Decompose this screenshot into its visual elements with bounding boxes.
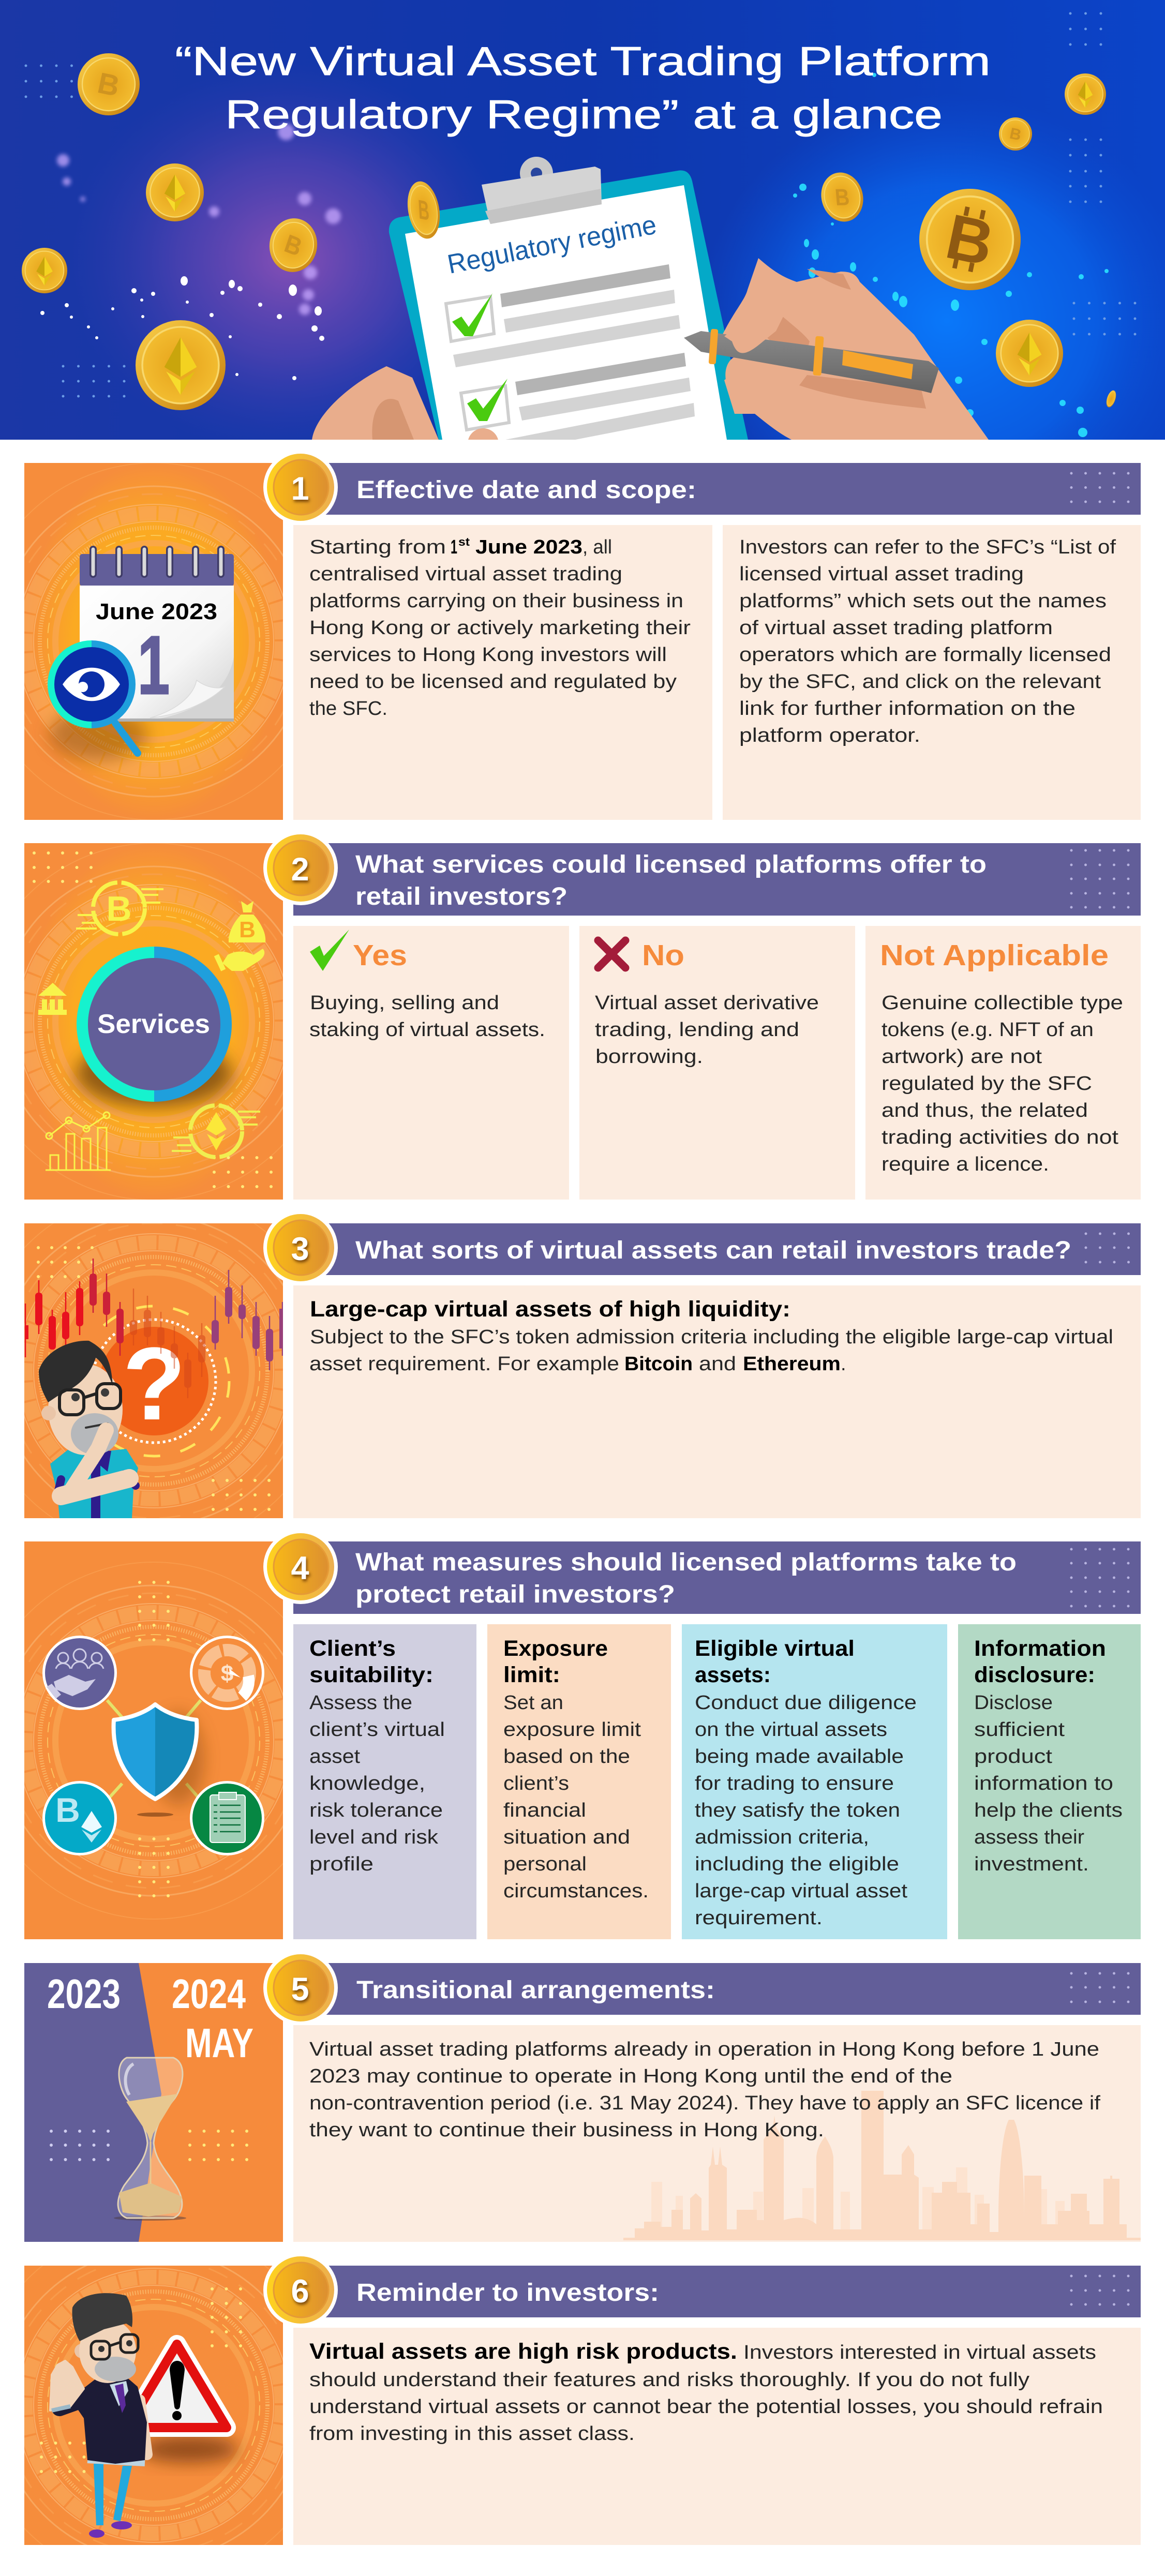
text panel: risk reminder: from investing in this asset class. xyxy=(309,2423,635,2445)
text panel: effective date: 1 xyxy=(451,536,457,558)
text panel: large-cap virtual assets: Bitcoin xyxy=(624,1353,693,1375)
icon: virtual assets xyxy=(42,1781,117,1855)
panel: no: No xyxy=(642,939,684,972)
panel: exposure limit: personal xyxy=(503,1853,587,1875)
icon: bitcoin coin xyxy=(78,53,140,115)
panel: eligible virtual assets: including the eligible xyxy=(695,1853,899,1875)
icon: magnifier with eye xyxy=(48,640,138,753)
panel: information disclosure: help the clients xyxy=(974,1800,1123,1821)
heading: Effective date and scope: xyxy=(356,476,696,504)
panel: not applicable: and thus, the related xyxy=(882,1100,1088,1121)
panel: not applicable: Not Applicable xyxy=(880,939,1109,972)
icon: bitcoin coin right xyxy=(816,168,869,227)
panel: not applicable: trading activities do not xyxy=(882,1127,1119,1148)
header bar xyxy=(293,1963,1141,2015)
text panel: list of licensed platforms: of virtual asset trading platform xyxy=(739,617,1053,639)
number badge 2: 2 xyxy=(291,851,309,888)
text panel: effective date: centralised virtual asset trading xyxy=(309,563,622,585)
number badge 4: 4 xyxy=(291,1550,309,1586)
icon: large bitcoin coin xyxy=(919,189,1021,290)
number badge 5 xyxy=(263,1951,338,2025)
number badge 6: 6 xyxy=(291,2273,309,2310)
panel: eligible virtual assets: they satisfy the token xyxy=(695,1800,900,1821)
panel: eligible virtual assets: for trading to ensure xyxy=(695,1773,894,1794)
icon: coin on clipboard: B xyxy=(417,194,430,227)
header bar xyxy=(293,843,1141,916)
panel: client's suitability: Client’s xyxy=(309,1636,396,1661)
right hand with pen xyxy=(684,258,989,440)
icon: ethereum coin xyxy=(1065,73,1106,115)
year labels: 2023 xyxy=(47,1971,121,2017)
text panel: large-cap virtual assets: Subject to the SFC’s token admission criteria including the eligible large-cap virtual xyxy=(310,1326,1113,1348)
panel: calendar illustration xyxy=(0,463,332,820)
text panel: risk reminder: Virtual assets are high risk products. xyxy=(309,2339,737,2364)
question circle xyxy=(79,1306,229,1456)
panel: eligible virtual assets: admission criteria, xyxy=(695,1826,869,1848)
text panel: effective date: June 2023 xyxy=(475,536,582,558)
panel: client's suitability xyxy=(293,1624,476,1939)
panel: eligible virtual assets: large-cap virtual asset xyxy=(695,1880,907,1902)
text panel: effective date: need to be licensed and regulated by xyxy=(309,671,677,693)
panel: hourglass illustration xyxy=(24,1963,283,2242)
panel: eligible virtual assets xyxy=(682,1624,947,1939)
clipboard heading: Regulatory regime xyxy=(445,210,659,280)
text panel: list of licensed platforms: platforms” which sets out the names xyxy=(739,590,1107,612)
section 4: protection measures xyxy=(0,1530,1141,1939)
panel: exposure limit: situation and xyxy=(503,1826,630,1848)
panel: not applicable: Genuine collectible type xyxy=(882,992,1123,1014)
number badge 3: 3 xyxy=(291,1231,309,1267)
text panel: large-cap virtual assets: and xyxy=(699,1353,736,1375)
number badge 1: 1 xyxy=(291,471,309,507)
panel: yes: staking of virtual assets. xyxy=(309,1019,545,1041)
number badge 6 xyxy=(263,2253,338,2327)
number badge 2 xyxy=(263,831,338,905)
candlestick chart xyxy=(25,1259,283,1398)
panel: client's suitability: suitability: xyxy=(309,1663,434,1687)
panel: eligible virtual assets: assets: xyxy=(695,1663,771,1687)
panel: thinking man illustration xyxy=(0,1192,332,1549)
year labels xyxy=(47,1971,253,2066)
panel: eligible virtual assets: on the virtual assets xyxy=(695,1719,887,1741)
section 5: transitional arrangements xyxy=(24,1951,1141,2242)
text panel: large-cap virtual assets: Large-cap virtual assets of high liquidity: xyxy=(310,1297,790,1322)
icon: calendar xyxy=(80,549,234,722)
icon: client hand and people xyxy=(42,1636,117,1710)
number badge 4 xyxy=(263,1530,338,1604)
panel: client's suitability: risk tolerance xyxy=(309,1800,443,1821)
icon: coin on clipboard xyxy=(404,179,444,241)
text panel: effective date: Starting from xyxy=(309,536,446,558)
text panel: effective date xyxy=(293,525,712,820)
number badge 1 xyxy=(263,450,338,525)
section 1: effective date and scope xyxy=(0,450,1141,820)
icon: tilted bitcoin coin xyxy=(269,218,318,272)
icon: risk gauge xyxy=(190,1636,264,1710)
panel: information disclosure xyxy=(958,1624,1141,1939)
icon: shield xyxy=(114,1704,197,1799)
number badge 3 xyxy=(263,1210,338,1285)
text panel: effective date: , all xyxy=(582,536,612,558)
question circle: ? xyxy=(123,1326,186,1442)
heading: Transitional arrangements: xyxy=(356,1976,715,2004)
panel: eligible virtual assets: requirement. xyxy=(695,1907,823,1929)
icon: bitcoin ring: B xyxy=(106,889,132,928)
text panel: transition period xyxy=(293,2025,1141,2242)
text panel: risk reminder: understand virtual assets or cannot bear the potential losses, you should refrain xyxy=(309,2396,1103,2418)
icon: virtual assets: B xyxy=(55,1791,80,1829)
heading xyxy=(355,851,987,910)
panel: exposure limit: Exposure xyxy=(503,1636,608,1661)
text panel: large-cap virtual assets: Ethereum xyxy=(743,1353,841,1375)
panel: warning illustration xyxy=(0,2227,332,2576)
section 2: services xyxy=(0,831,1141,1200)
panel: client's suitability: level and risk xyxy=(309,1826,439,1848)
title: “New Virtual Asset Trading Platform xyxy=(175,38,991,84)
icon: ethereum coin far left xyxy=(22,248,67,293)
services circle: Services xyxy=(97,1009,210,1039)
panel: not applicable: tokens (e.g. NFT of an xyxy=(882,1019,1094,1041)
calendar month: June 2023 xyxy=(96,599,217,624)
panel: exposure limit: exposure limit xyxy=(503,1719,641,1741)
title xyxy=(175,38,991,137)
header bar xyxy=(293,1541,1141,1614)
icon: ethereum coin right xyxy=(996,320,1063,387)
section 3: tradable virtual assets xyxy=(0,1192,1141,1549)
heading: What measures should licensed platforms take to xyxy=(355,1549,1017,1576)
icon: small bitcoin coin: B xyxy=(1008,125,1023,144)
panel: no: trading, lending and xyxy=(595,1019,799,1041)
year labels: MAY xyxy=(185,2020,253,2066)
panel: yes xyxy=(293,926,569,1200)
panel: shield illustration xyxy=(0,1541,332,1939)
panel: no: borrowing. xyxy=(595,1046,703,1068)
text panel: list of licensed platforms: operators which are formally licensed xyxy=(739,644,1111,666)
panel: services illustration xyxy=(0,843,332,1200)
panel: exposure limit: financial xyxy=(503,1800,586,1821)
icon: tilted bitcoin coin: B xyxy=(281,229,305,262)
icon: bitcoin coin: B xyxy=(95,66,123,103)
panel: client's suitability: Assess the xyxy=(309,1692,412,1714)
panel: no xyxy=(579,926,855,1200)
header bar xyxy=(293,1223,1141,1275)
text panel: large-cap virtual assets xyxy=(293,1285,1141,1518)
text panel: large-cap virtual assets: asset requirement. For example xyxy=(309,1353,619,1375)
icon: red cross xyxy=(598,940,625,968)
text panel: large-cap virtual assets: . xyxy=(841,1353,846,1375)
panel: exposure limit: circumstances. xyxy=(503,1880,649,1902)
panel: exposure limit: Set an xyxy=(503,1692,563,1714)
title: Regulatory Regime” at a glance xyxy=(225,92,943,137)
left hand xyxy=(312,366,439,440)
panel: eligible virtual assets: Conduct due diligence xyxy=(695,1692,917,1714)
text panel: effective date: platforms carrying on their business in xyxy=(309,590,683,612)
icon: tiny coin xyxy=(1104,389,1118,409)
icon: ethereum ring xyxy=(172,1105,260,1157)
icon: money bag and hand: B xyxy=(239,917,256,942)
section 6: reminder to investors xyxy=(0,2227,1141,2576)
icon: hourglass xyxy=(114,2058,186,2221)
text panel: effective date: the SFC. xyxy=(309,698,387,720)
panel: no: Virtual asset derivative xyxy=(595,992,819,1014)
panel: information disclosure: Information xyxy=(974,1636,1106,1661)
text panel: list of licensed platforms: link for further information on the xyxy=(739,698,1076,720)
icon: bank xyxy=(38,983,67,1015)
heading xyxy=(355,1549,1017,1608)
year labels: 2024 xyxy=(172,1971,246,2017)
panel: information disclosure: product xyxy=(974,1746,1053,1768)
icon: large bitcoin coin: B xyxy=(940,200,999,279)
text panel: effective date: st xyxy=(458,535,470,548)
services circle xyxy=(77,947,232,1102)
icon: ethereum coin left xyxy=(146,163,204,221)
text panel: transition period: they want to continue their business in Hong Kong. xyxy=(309,2119,824,2141)
icon: small bitcoin coin xyxy=(999,117,1032,151)
heading: protect retail investors? xyxy=(355,1581,675,1608)
panel: client's suitability: client’s virtual xyxy=(309,1719,445,1741)
icon: large ethereum coin xyxy=(136,320,226,410)
clipboard xyxy=(389,157,748,440)
text panel: transition period: non-contravention period (i.e. 31 May 2024). They have to apply an SFC licence if xyxy=(309,2092,1100,2114)
panel: exposure limit: limit: xyxy=(503,1663,560,1687)
panel: not applicable: regulated by the SFC xyxy=(882,1073,1092,1095)
icon: warning triangle xyxy=(127,2344,227,2428)
panel: client's suitability: asset xyxy=(309,1746,360,1768)
panel: client's suitability: profile xyxy=(309,1853,374,1875)
text panel: effective date: Hong Kong or actively marketing their xyxy=(309,617,691,639)
header bar xyxy=(293,463,1141,515)
icon: growth chart xyxy=(46,1112,111,1170)
hero banner xyxy=(0,0,1165,440)
man raising hand xyxy=(50,2293,147,2538)
text panel: risk reminder: Investors interested in virtual assets xyxy=(743,2342,1096,2363)
text panel: list of licensed platforms: Investors can refer to the SFC’s “List of xyxy=(739,536,1116,558)
panel: not applicable: artwork) are not xyxy=(882,1046,1042,1068)
panel: exposure limit: client’s xyxy=(503,1773,569,1794)
panel: yes: Yes xyxy=(353,939,407,972)
text panel: list of licensed platforms: licensed virtual asset trading xyxy=(739,563,1024,585)
text panel: transition period: 2023 may continue to operate in Hong Kong until the end of the xyxy=(309,2065,952,2087)
heading: retail investors? xyxy=(355,883,567,910)
panel: exposure limit: based on the xyxy=(503,1746,630,1768)
text panel: transition period: Virtual asset trading platforms already in operation in Hong Kong before 1 June xyxy=(309,2039,1099,2060)
panel: eligible virtual assets: being made available xyxy=(695,1746,904,1768)
icon: bitcoin ring xyxy=(76,882,163,934)
text panel: list of licensed platforms: platform operator. xyxy=(739,725,920,746)
panel: eligible virtual assets: Eligible virtual xyxy=(695,1636,855,1661)
text panel: effective date: services to Hong Kong investors will xyxy=(309,644,667,666)
heading: What sorts of virtual assets can retail investors trade? xyxy=(355,1237,1071,1264)
text panel: list of licensed platforms xyxy=(723,525,1141,820)
panel: information disclosure: sufficient xyxy=(974,1719,1065,1741)
text panel: risk reminder xyxy=(293,2328,1141,2545)
panel: information disclosure: disclosure: xyxy=(974,1663,1095,1687)
panel: exposure limit xyxy=(487,1624,671,1939)
skyline xyxy=(623,2091,1141,2240)
panel: not applicable: require a licence. xyxy=(882,1154,1049,1175)
icon: bitcoin coin right: B xyxy=(834,184,850,211)
header bar xyxy=(293,2266,1141,2317)
icon: money bag and hand xyxy=(214,901,265,971)
icon: green check xyxy=(310,930,349,971)
panel: information disclosure: Disclose xyxy=(974,1692,1053,1714)
panel: information disclosure: assess their xyxy=(974,1826,1084,1848)
thumb on clipboard xyxy=(468,428,499,459)
number badge 5: 5 xyxy=(291,1971,309,2008)
panel: yes: Buying, selling and xyxy=(310,992,499,1014)
text panel: risk reminder: should understand their features and risks thoroughly. If you do not fully xyxy=(309,2369,1029,2391)
panel: not applicable xyxy=(865,926,1141,1200)
heading: What services could licensed platforms offer to xyxy=(355,851,987,878)
heading: Reminder to investors: xyxy=(356,2279,659,2307)
panel: information disclosure: investment. xyxy=(974,1853,1089,1875)
thinking man xyxy=(39,1341,138,1518)
panel: information disclosure: information to xyxy=(974,1773,1113,1794)
calendar day: 1 xyxy=(138,619,170,711)
icon: checklist xyxy=(190,1781,264,1855)
icon: risk gauge: $ xyxy=(221,1661,233,1686)
text panel: list of licensed platforms: by the SFC, and click on the relevant xyxy=(739,671,1101,693)
shield shadow xyxy=(137,1813,173,1817)
panel: client's suitability: knowledge, xyxy=(309,1773,425,1794)
